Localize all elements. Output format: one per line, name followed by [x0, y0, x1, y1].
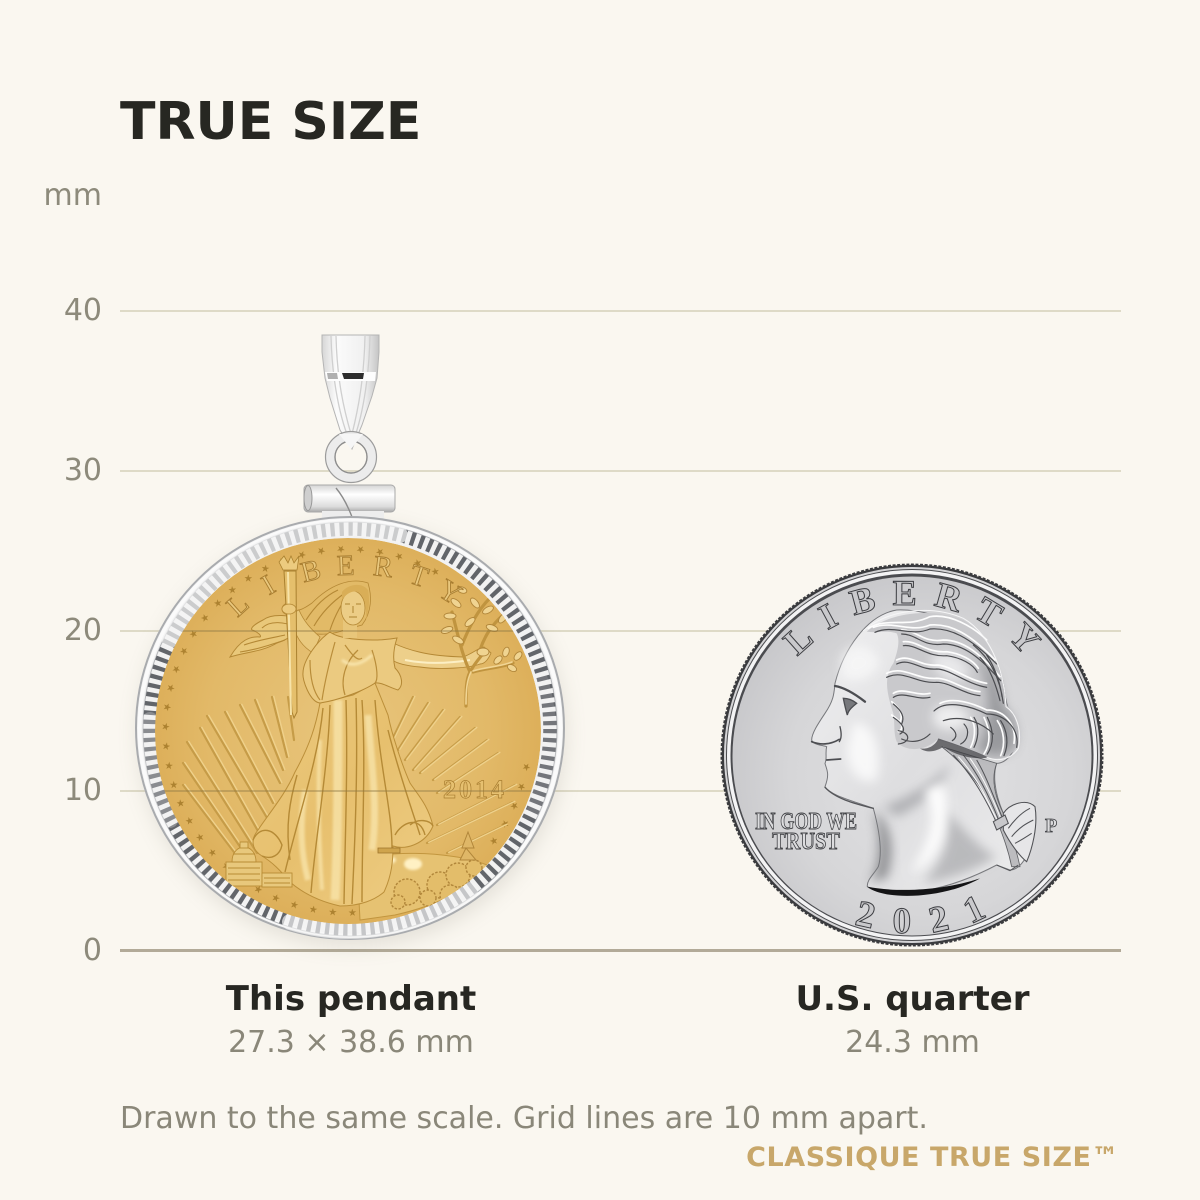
quarter date: 2021 — [855, 896, 986, 934]
pendant soft shadow — [138, 523, 566, 947]
quarter label: 24.3 mm — [845, 1025, 980, 1060]
pendant label — [226, 979, 476, 1060]
quarter rim — [720, 564, 1104, 946]
pendant tube hinge — [304, 485, 395, 540]
coin date: 2014 — [443, 775, 507, 804]
coin legend LIBERTY: R — [372, 550, 395, 584]
skirt of Liberty — [253, 683, 433, 906]
coin legend LIBERTY — [224, 555, 464, 618]
quarter motto: IN GOD WE — [755, 809, 857, 835]
coin legend LIBERTY: I — [256, 569, 281, 601]
coin legend LIBERTY: E — [336, 550, 355, 582]
grid lines seen through coin — [150, 630, 550, 792]
pendant label: 27.3 × 38.6 mm — [228, 1025, 474, 1060]
dress light bands — [302, 700, 375, 900]
footnote: Drawn to the same scale. Grid lines are 10 mm apart. — [120, 1101, 928, 1136]
dress folds — [253, 698, 433, 904]
white strands — [868, 616, 1014, 756]
quarter coin illustration — [720, 564, 1104, 946]
brand mark: CLASSIQUE TRUE SIZE™ — [746, 1142, 1119, 1173]
ground hill — [357, 853, 487, 920]
sandal — [378, 848, 400, 853]
quarter legend LIBERTY: LIBERTY — [781, 580, 1042, 657]
hair and tail of Liberty — [230, 581, 370, 657]
coin sun rays — [183, 696, 517, 860]
y axis tick labels: 30 — [64, 453, 102, 488]
ponytail — [942, 747, 1020, 867]
jaw and neck shading — [870, 810, 891, 883]
pendant bezel — [135, 516, 565, 940]
coin star border: ★★★★★★★★★★★★★★★★★★★★★★★★★★★★★★★★★★★ — [162, 546, 438, 916]
y axis tick labels: 20 — [64, 613, 102, 648]
gold coin — [155, 538, 541, 924]
quarter label: U.S. quarter — [795, 979, 1030, 1019]
coin legend LIBERTY: Y — [432, 573, 467, 612]
y axis tick labels: 10 — [64, 773, 102, 808]
quarter mint mark: P — [1045, 815, 1057, 837]
coin star border: ★★★★★★ — [490, 764, 530, 844]
coin legend LIBERTY: L — [221, 587, 255, 623]
y axis tick labels: 0 — [83, 933, 102, 968]
torso and arms of Liberty — [282, 585, 491, 703]
coin legend LIBERTY: B — [298, 553, 324, 589]
y axis tick labels — [64, 293, 102, 968]
quarter label — [795, 979, 1030, 1060]
grid lines and axis — [120, 310, 1121, 952]
pendant ring — [326, 432, 376, 482]
title: TRUE SIZE — [120, 92, 421, 152]
axis unit label: mm — [44, 178, 102, 213]
quarter motto — [755, 809, 857, 855]
coin legend LIBERTY: T — [405, 558, 432, 594]
foliage and tree on ground — [391, 832, 482, 909]
dark strands — [875, 629, 1017, 756]
y axis tick labels: 40 — [64, 293, 102, 328]
hair shadow mass — [977, 653, 1016, 755]
true size comparison chart — [46, 100, 1121, 1170]
bust shadow — [867, 878, 980, 896]
hair ribbon and facial features — [812, 686, 1036, 896]
bezel bright highlights — [150, 528, 549, 931]
pendant illustration — [134, 334, 570, 949]
quarter motto: TRUST — [772, 829, 840, 855]
olive branch — [440, 585, 524, 706]
bezel diamond cut stripes — [150, 529, 550, 929]
capitol building — [226, 842, 292, 887]
torch — [279, 556, 299, 718]
Washington bust — [812, 610, 1034, 893]
hair waves — [863, 610, 1020, 760]
pendant bail — [322, 335, 379, 449]
pendant label: This pendant — [226, 979, 476, 1019]
